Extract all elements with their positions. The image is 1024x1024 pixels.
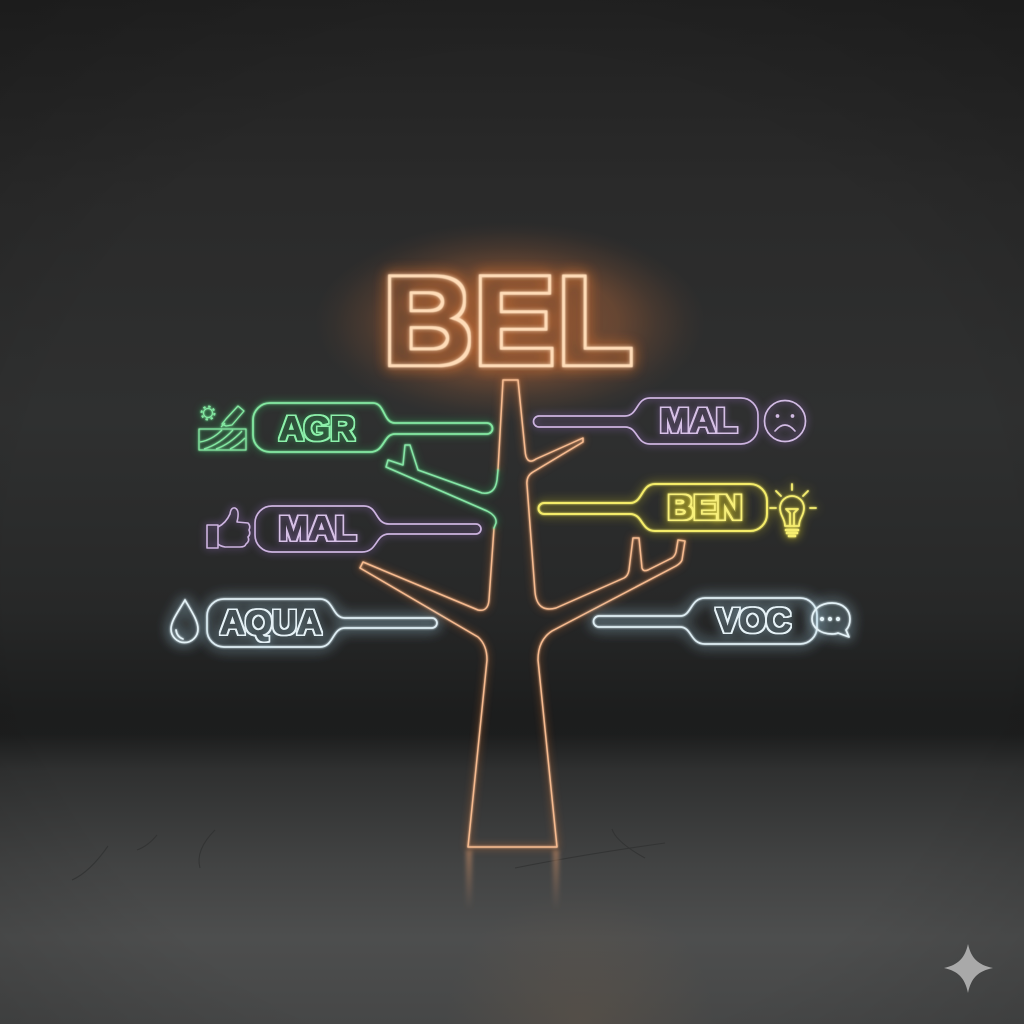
background: dark wall: [0, 0, 1024, 760]
branch label: BEN: [538, 484, 816, 536]
icon: water drop: [171, 600, 198, 642]
label text: VOC: VOC: [716, 602, 791, 640]
tree: trunk and right branches: [360, 380, 685, 847]
ambient glow behind title: [315, 222, 705, 422]
pill: MAL left: [255, 506, 481, 552]
pill: AGR: [253, 403, 492, 452]
tree outline: [360, 380, 685, 847]
floor reflection of trunk: [466, 850, 559, 910]
label text: AQUA: AQUA: [220, 604, 322, 642]
title: BEL: B: [383, 252, 473, 391]
title: BEL: [383, 252, 633, 391]
branch label: AQUA: [171, 599, 437, 647]
background: concrete floor: [0, 735, 1024, 1024]
pill: BEN: [538, 484, 767, 531]
icon: sad face: [764, 400, 806, 442]
icon: field with gear and trowel: [199, 406, 246, 450]
title: BEL: E: [474, 252, 555, 391]
icon: sparkle watermark: [944, 944, 993, 993]
branch label: MAL right: [534, 398, 806, 444]
label text: MAL right: MAL: [660, 402, 738, 440]
label text: BEN: BEN: [668, 489, 742, 527]
icon: speech bubble: [812, 603, 850, 637]
pill: VOC: [594, 598, 817, 644]
icon: light bulb: [770, 484, 816, 536]
pill: AQUA: [207, 599, 437, 647]
branch label: MAL left: [207, 506, 481, 552]
title: BEL: L: [557, 252, 633, 391]
tree: green upper-left branch: [386, 445, 498, 528]
icon: thumbs up: [207, 508, 250, 548]
pill: MAL right: [534, 398, 758, 444]
floor cracks: [72, 829, 665, 880]
branch label: AGR: [199, 403, 492, 452]
label text: MAL left: MAL: [278, 510, 356, 548]
label text: AGR: AGR: [279, 410, 355, 448]
branch label: VOC: [594, 598, 850, 644]
ambient warm floor glow: [445, 889, 715, 1024]
